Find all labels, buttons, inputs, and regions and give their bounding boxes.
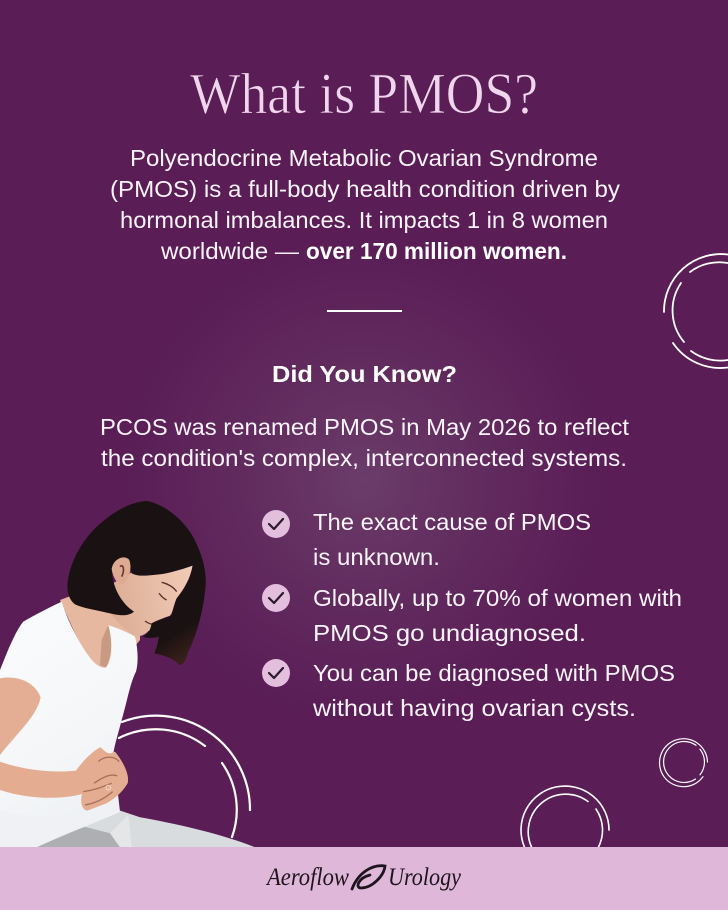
title: What is PMOS? (190, 61, 538, 126)
decorative rings: small right (660, 739, 708, 787)
decorative rings: top right (664, 254, 728, 368)
upper arm (0, 677, 41, 755)
intro text block: Polyendocrine Metabolic Ovarian Syndrome (130, 145, 598, 171)
logo: Aeroflow Urology: Urology (388, 864, 462, 891)
logo: Aeroflow Urology: Aeroflow (265, 864, 349, 891)
fact 3: without having ovarian cysts. (312, 695, 636, 721)
checklist (262, 509, 682, 721)
neck and chest (60, 590, 140, 677)
heading: did you know: Did You Know? (272, 361, 457, 387)
logo swirl (352, 866, 385, 889)
face (107, 565, 193, 636)
renaming text block: the condition's complex, interconnected systems. (101, 445, 627, 471)
hair (67, 501, 206, 665)
facial features (145, 582, 177, 624)
intro text block: hormonal imbalances. It impacts 1 in 8 women (120, 207, 608, 233)
renaming text block (100, 414, 630, 471)
forearm and hands (0, 747, 128, 811)
fact 3 (262, 659, 675, 721)
fact 2 (262, 584, 682, 646)
decorative rings: bottom right (521, 786, 609, 847)
fact 1: The exact cause of PMOS (313, 509, 591, 535)
fact 2: PMOS go undiagnosed. (313, 620, 586, 646)
ear (112, 557, 130, 585)
decorative rings: behind woman (119, 716, 250, 837)
fact 1 (262, 509, 591, 570)
intro text block: (PMOS) is a full-body health condition driven by (110, 176, 621, 202)
intro text block (110, 145, 621, 264)
intro text block: over 170 million women. (306, 238, 567, 264)
fact 1: is unknown. (313, 544, 440, 570)
footer band (0, 847, 728, 910)
photo: woman holding her stomach (0, 501, 255, 847)
fact 2: Globally, up to 70% of women with (313, 585, 682, 611)
head (67, 501, 206, 665)
trousers (37, 810, 255, 847)
t-shirt (0, 602, 138, 847)
intro text block: worldwide — (160, 238, 299, 264)
renaming text block: PCOS was renamed PMOS in May 2026 to reflect (100, 414, 630, 440)
logo: Aeroflow Urology (265, 864, 462, 891)
fact 3: You can be diagnosed with PMOS (313, 660, 675, 686)
